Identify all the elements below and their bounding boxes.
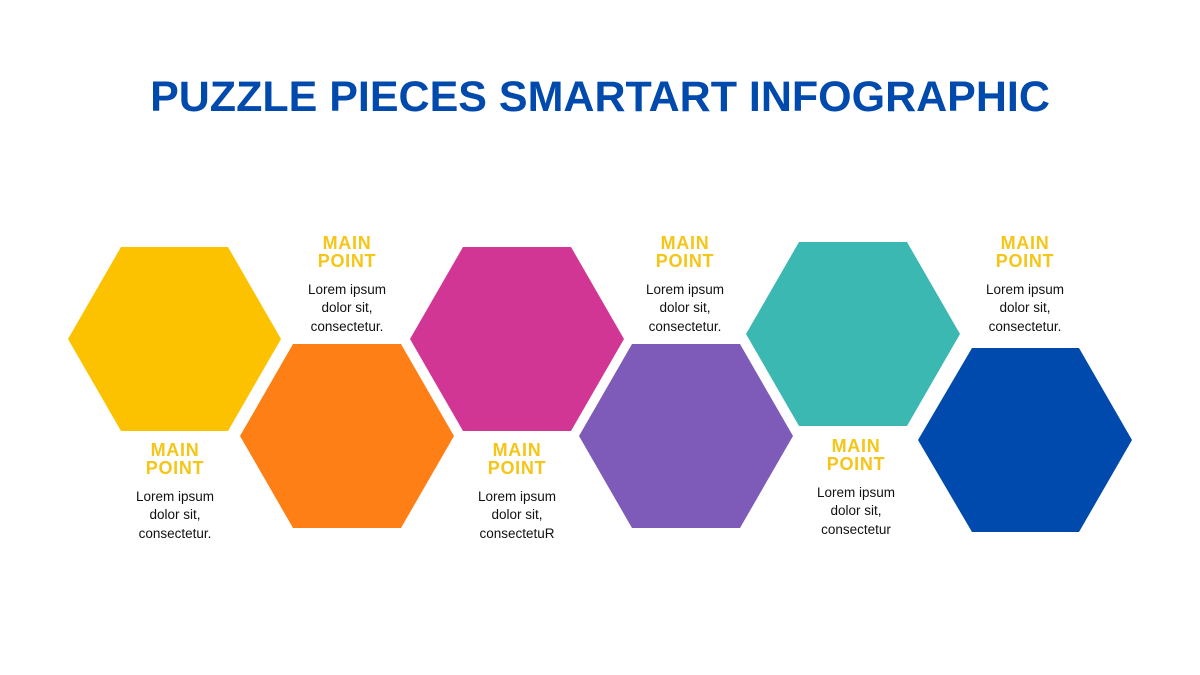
text block: point 5: [817, 436, 895, 536]
text block: point 3: consectetuR: [479, 526, 555, 540]
text block: point 3: MAIN: [493, 440, 541, 460]
hexagon: orange: [240, 344, 454, 528]
hexagon: blue: [918, 348, 1132, 532]
text block: point 2: POINT: [318, 251, 376, 271]
text block: point 4: Lorem ipsum: [646, 282, 724, 297]
text block: point 6: POINT: [996, 251, 1054, 271]
text block: point 4: MAIN: [661, 233, 709, 253]
text block: point 3: POINT: [488, 458, 546, 478]
text block: point 5: Lorem ipsum: [817, 485, 895, 500]
text block: point 3: Lorem ipsum: [478, 489, 556, 504]
text block: point 2: consectetur.: [311, 318, 383, 334]
text block: point 2: [308, 233, 386, 334]
text block: point 3: dolor sit,: [491, 507, 543, 522]
title: PUZZLE PIECES SMARTART INFOGRAPHIC: [150, 73, 1050, 121]
text block: point 5: MAIN: [832, 436, 880, 456]
text block: point 5: consectetur: [821, 522, 891, 536]
hexagon: yellow: [68, 247, 281, 431]
hexagon: teal: [746, 242, 960, 426]
text block: point 1: dolor sit,: [149, 507, 201, 522]
text block: point 1: Lorem ipsum: [136, 489, 214, 504]
text block: point 1: [136, 440, 214, 540]
text block: point 6: dolor sit,: [999, 300, 1051, 315]
text block: point 4: dolor sit,: [659, 300, 711, 315]
text block: point 6: consectetur.: [989, 318, 1061, 334]
text block: point 2: MAIN: [323, 233, 371, 253]
text block: point 3: [478, 440, 556, 540]
text block: point 6: Lorem ipsum: [986, 282, 1064, 297]
text block: point 4: POINT: [656, 251, 714, 271]
text block: point 5: POINT: [827, 454, 885, 474]
text block: point 4: consectetur.: [649, 318, 721, 334]
text block: point 1: MAIN: [151, 440, 199, 460]
text block: point 1: consectetur.: [139, 526, 211, 540]
text block: point 5: dolor sit,: [830, 503, 882, 518]
text block: point 2: dolor sit,: [321, 300, 373, 315]
text block: point 2: Lorem ipsum: [308, 282, 386, 297]
text block: point 6: [986, 233, 1064, 334]
text block: point 6: MAIN: [1001, 233, 1049, 253]
text block: point 1: POINT: [146, 458, 204, 478]
hexagon: magenta: [410, 247, 624, 431]
hexagon: purple: [579, 344, 793, 528]
text block: point 4: [646, 233, 724, 334]
